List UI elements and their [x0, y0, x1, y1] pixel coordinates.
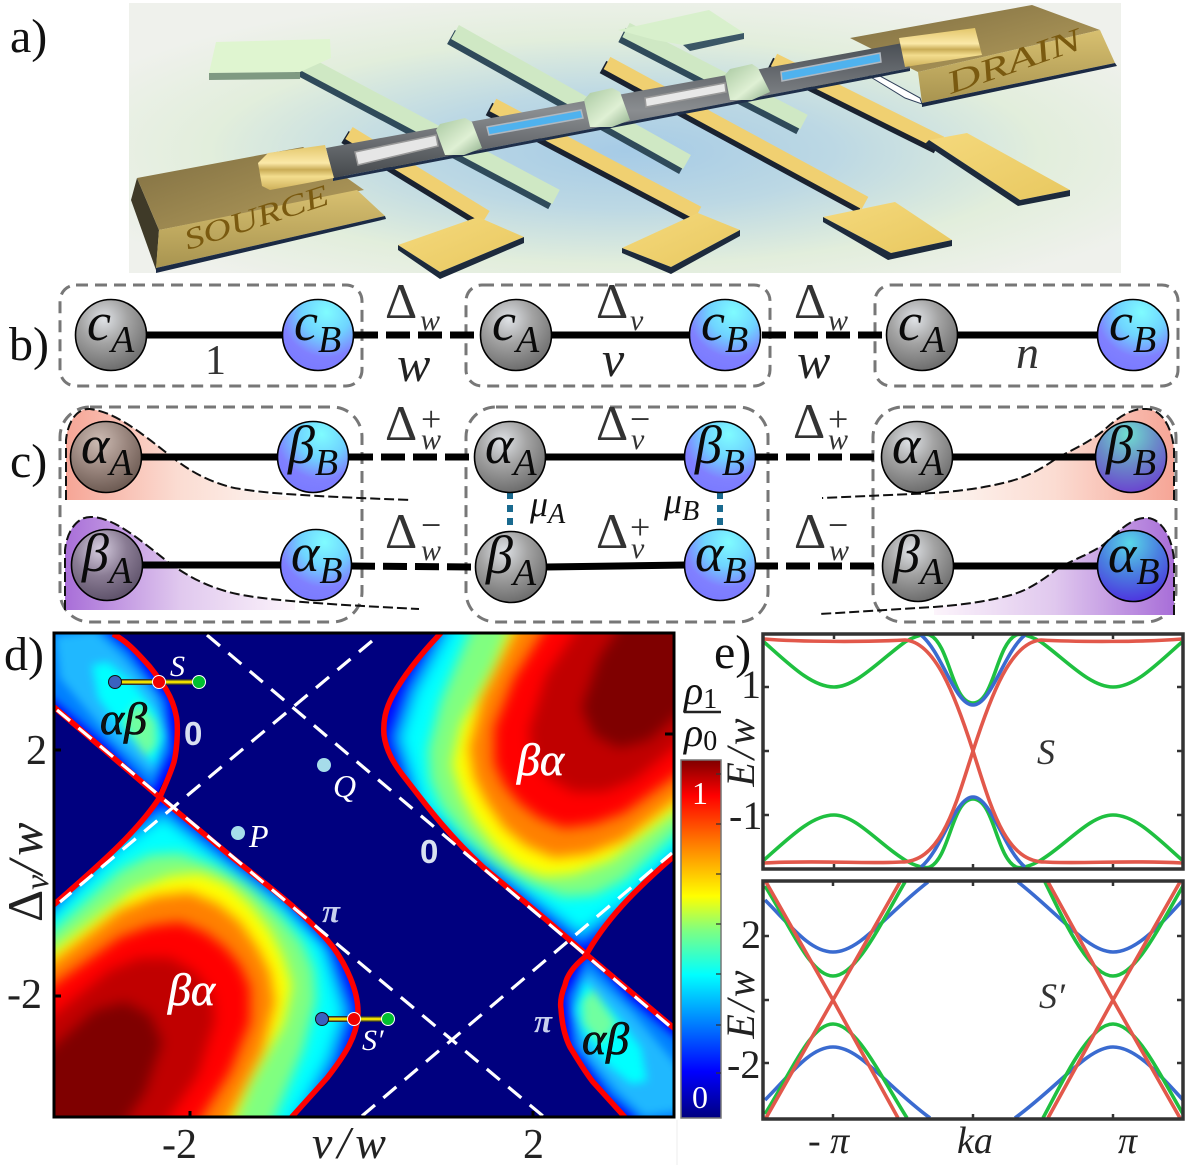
white window 1 [355, 135, 438, 165]
source and drain contacts [258, 28, 982, 190]
axis labels d: -2 [162, 1122, 197, 1167]
gate contacts [436, 64, 770, 155]
site c_B 2: c [701, 292, 725, 352]
point P [231, 818, 269, 854]
marker S prime: S′ [362, 1024, 384, 1057]
colorbar title: ρ [684, 710, 703, 755]
site c_A 1 [76, 292, 146, 370]
green gate strip 2 [451, 32, 687, 167]
coupling labels [385, 393, 849, 567]
site c_A 1: A [108, 319, 135, 361]
site c_A 2: c [492, 292, 516, 352]
axis labels e [718, 662, 1138, 1162]
site alpha_B right: B [1136, 551, 1160, 593]
site c_B 3: B [1133, 319, 1156, 361]
coupling labels: v [631, 532, 645, 565]
site c_B 1 [282, 292, 354, 370]
marker S: S [170, 650, 185, 683]
site beta_A middle [476, 525, 546, 602]
blue bands [765, 882, 1183, 1118]
coupling labels: μ [530, 484, 548, 524]
white dashed lines [57, 635, 672, 1116]
edge state: bottom left [65, 517, 295, 610]
green bands [764, 634, 1182, 868]
phase labels: αβ [582, 1013, 629, 1064]
axis labels e: ka [957, 1120, 993, 1162]
hopping labels: Δ [596, 273, 628, 329]
site beta_B left: β [288, 415, 315, 475]
coupling labels: + [630, 507, 650, 547]
panel d: phase diagram heat map [52, 632, 676, 1118]
phase labels: π [534, 1004, 553, 1040]
panel c label: c) [10, 435, 47, 488]
panel c: two coupled chains [60, 393, 1176, 622]
region: alpha-beta lower right [563, 958, 672, 1116]
region: alpha-beta upper left [56, 634, 175, 792]
axis labels d: v/w [312, 1117, 391, 1167]
site alpha_B right: α [1108, 524, 1136, 584]
site alpha_A right [882, 415, 952, 492]
site beta_B left [278, 415, 348, 492]
colorbar title: 1 [703, 684, 717, 715]
coupling labels: + [828, 399, 848, 439]
blue bands [921, 635, 1025, 867]
coupling labels: w [421, 534, 441, 567]
site alpha_B middle: α [695, 523, 723, 583]
coupling labels: v [631, 423, 645, 456]
panel b label: b) [9, 318, 49, 371]
panel a: device schematic [129, 3, 1121, 279]
wavefunction outlines [65, 409, 1174, 615]
point P: P [248, 818, 269, 854]
coupling labels: Δ [794, 503, 826, 559]
edge state: top right [934, 409, 1174, 500]
site c_B 2 [690, 292, 760, 370]
site c_A 3 [886, 292, 958, 370]
axis labels e: - π [808, 1120, 850, 1162]
source electrode [131, 147, 386, 273]
edge state: top left [66, 409, 290, 500]
coupling labels: B [682, 496, 699, 527]
site alpha_A left: α [81, 415, 109, 475]
hopping labels: 1 [205, 338, 226, 384]
coupling labels: Δ [793, 393, 825, 449]
site beta_B right: β [1106, 415, 1133, 475]
coupling labels: w [828, 423, 848, 456]
site beta_A right: A [917, 551, 944, 593]
site c_B 3: c [1109, 292, 1133, 352]
marker S [108, 650, 206, 688]
phase labels: 0 [420, 833, 438, 870]
source label: SOURCE [180, 179, 333, 257]
coupling labels: Δ [596, 503, 628, 559]
coupling labels: − [630, 399, 650, 439]
hopping labels: Δ [385, 273, 417, 329]
site alpha_B left [280, 523, 352, 600]
axis labels e: 1 [741, 662, 761, 707]
hopping labels [205, 273, 1039, 392]
drain electrode [850, 5, 1117, 107]
colorbar title: 0 [703, 726, 717, 757]
site beta_A middle: β [486, 525, 513, 585]
colorbar: 1 [692, 775, 708, 811]
site alpha_B middle: B [723, 550, 747, 592]
panel d label: d) [4, 628, 44, 681]
site beta_B middle [684, 415, 756, 492]
coupling labels: A [546, 499, 566, 530]
axis labels e: π [1118, 1120, 1138, 1162]
site c_A 3: c [898, 292, 922, 352]
hopping labels: v [630, 304, 644, 337]
phase labels: βα [167, 964, 216, 1015]
site alpha_A middle [474, 415, 546, 492]
drain label: DRAIN [940, 20, 1088, 101]
axis labels e: -1 [729, 793, 762, 838]
hopping labels: v [602, 331, 625, 387]
S label: S [1037, 732, 1055, 772]
coupling labels: Δ [385, 503, 417, 559]
site c_B 3 [1098, 292, 1168, 370]
site alpha_A left: A [106, 442, 133, 484]
red bands [766, 882, 1180, 1118]
site c_B 1: c [294, 292, 318, 352]
marker S prime [316, 1012, 394, 1057]
site alpha_A left [70, 415, 142, 492]
panel e top: band structure S [763, 634, 1183, 869]
panel e bottom: band structure S prime [763, 881, 1183, 1119]
white window 2 [645, 83, 726, 107]
colorbar: 0 [692, 1079, 708, 1115]
axis labels e: 2 [741, 912, 761, 957]
panel a label: a) [10, 10, 47, 63]
phase labels: π [322, 894, 341, 930]
site beta_B left: B [315, 442, 338, 484]
panel e label: e) [714, 626, 751, 679]
axis labels e: -2 [727, 1042, 760, 1087]
site beta_A left [72, 523, 142, 600]
site c_B 1: B [318, 319, 341, 361]
channel bar [326, 43, 910, 181]
site alpha_A middle: A [510, 442, 537, 484]
site alpha_B right [1098, 524, 1168, 602]
gold gate strip 2 [489, 105, 740, 274]
red bands [764, 639, 1182, 863]
point Q: Q [333, 768, 356, 804]
point Q [317, 758, 356, 804]
region: beta-alpha upper right [386, 634, 672, 950]
site alpha_B left: α [291, 523, 319, 583]
coupling labels: − [828, 505, 848, 545]
gold gate strip 1 [345, 133, 524, 279]
site beta_A left: A [106, 550, 133, 592]
blue window 2 [781, 53, 881, 81]
coupling labels: w [421, 423, 441, 456]
site c_A 2 [480, 292, 552, 370]
phase labels: βα [516, 734, 565, 785]
phase labels: 0 [184, 715, 202, 752]
hopping labels: w [420, 304, 440, 337]
colorbar [677, 668, 721, 1165]
coupling labels: − [421, 505, 441, 545]
site c_A 3: A [919, 319, 946, 361]
site c_B 2: B [725, 319, 748, 361]
site beta_A right: β [893, 524, 920, 584]
hopping labels: w [797, 333, 830, 389]
site beta_A right [882, 524, 954, 602]
S prime label: S′ [1039, 976, 1066, 1016]
hopping labels: Δ [794, 273, 826, 329]
coupling labels: Δ [385, 395, 417, 451]
axis labels d: v [19, 874, 56, 890]
site alpha_A middle: α [485, 415, 513, 475]
axis labels d: 2 [523, 1122, 544, 1167]
site beta_A left: β [82, 523, 109, 583]
edge state: bottom right [934, 518, 1174, 615]
coupling labels: μ [664, 481, 682, 521]
site beta_B middle: β [695, 415, 722, 475]
on-site couplings [507, 492, 513, 532]
site alpha_B middle [684, 523, 756, 600]
axis ticks [54, 734, 674, 1117]
site beta_B right [1096, 415, 1166, 492]
colorbar title [682, 668, 721, 757]
site c_A 2: A [513, 319, 540, 361]
phase labels: αβ [100, 693, 147, 744]
site beta_B right: B [1133, 442, 1156, 484]
axis labels d: -2 [7, 972, 42, 1018]
panel b: chain [60, 273, 1178, 392]
site beta_B middle: B [722, 442, 745, 484]
hopping labels: w [828, 304, 848, 337]
axis labels d [0, 728, 544, 1167]
site beta_A middle: A [510, 552, 537, 594]
coupling labels: + [421, 399, 441, 439]
coupling labels: Δ [596, 395, 628, 451]
green gate strip 1 [209, 39, 556, 202]
hopping labels: w [397, 336, 430, 392]
axis labels e: E/w [718, 715, 763, 788]
region: beta-alpha lower left [56, 802, 356, 1116]
axis labels d: 2 [26, 728, 47, 774]
green bands [765, 882, 1183, 1118]
axis labels e: E/w [718, 967, 763, 1040]
site alpha_B left: B [319, 550, 343, 592]
coupling labels: w [829, 534, 849, 567]
site c_A 1: c [87, 292, 111, 352]
gold gate strip 4 [770, 60, 1070, 206]
red phase boundaries [56, 634, 672, 1116]
colorbar title: ρ [684, 668, 703, 713]
hopping labels: n [1016, 327, 1039, 378]
gold gate strip 3 [603, 63, 952, 260]
green gate strip 3 [618, 10, 804, 127]
site alpha_A right: A [917, 442, 944, 484]
site alpha_A right: α [892, 415, 920, 475]
phase labels [100, 693, 629, 1064]
blue window 1 [487, 110, 583, 135]
